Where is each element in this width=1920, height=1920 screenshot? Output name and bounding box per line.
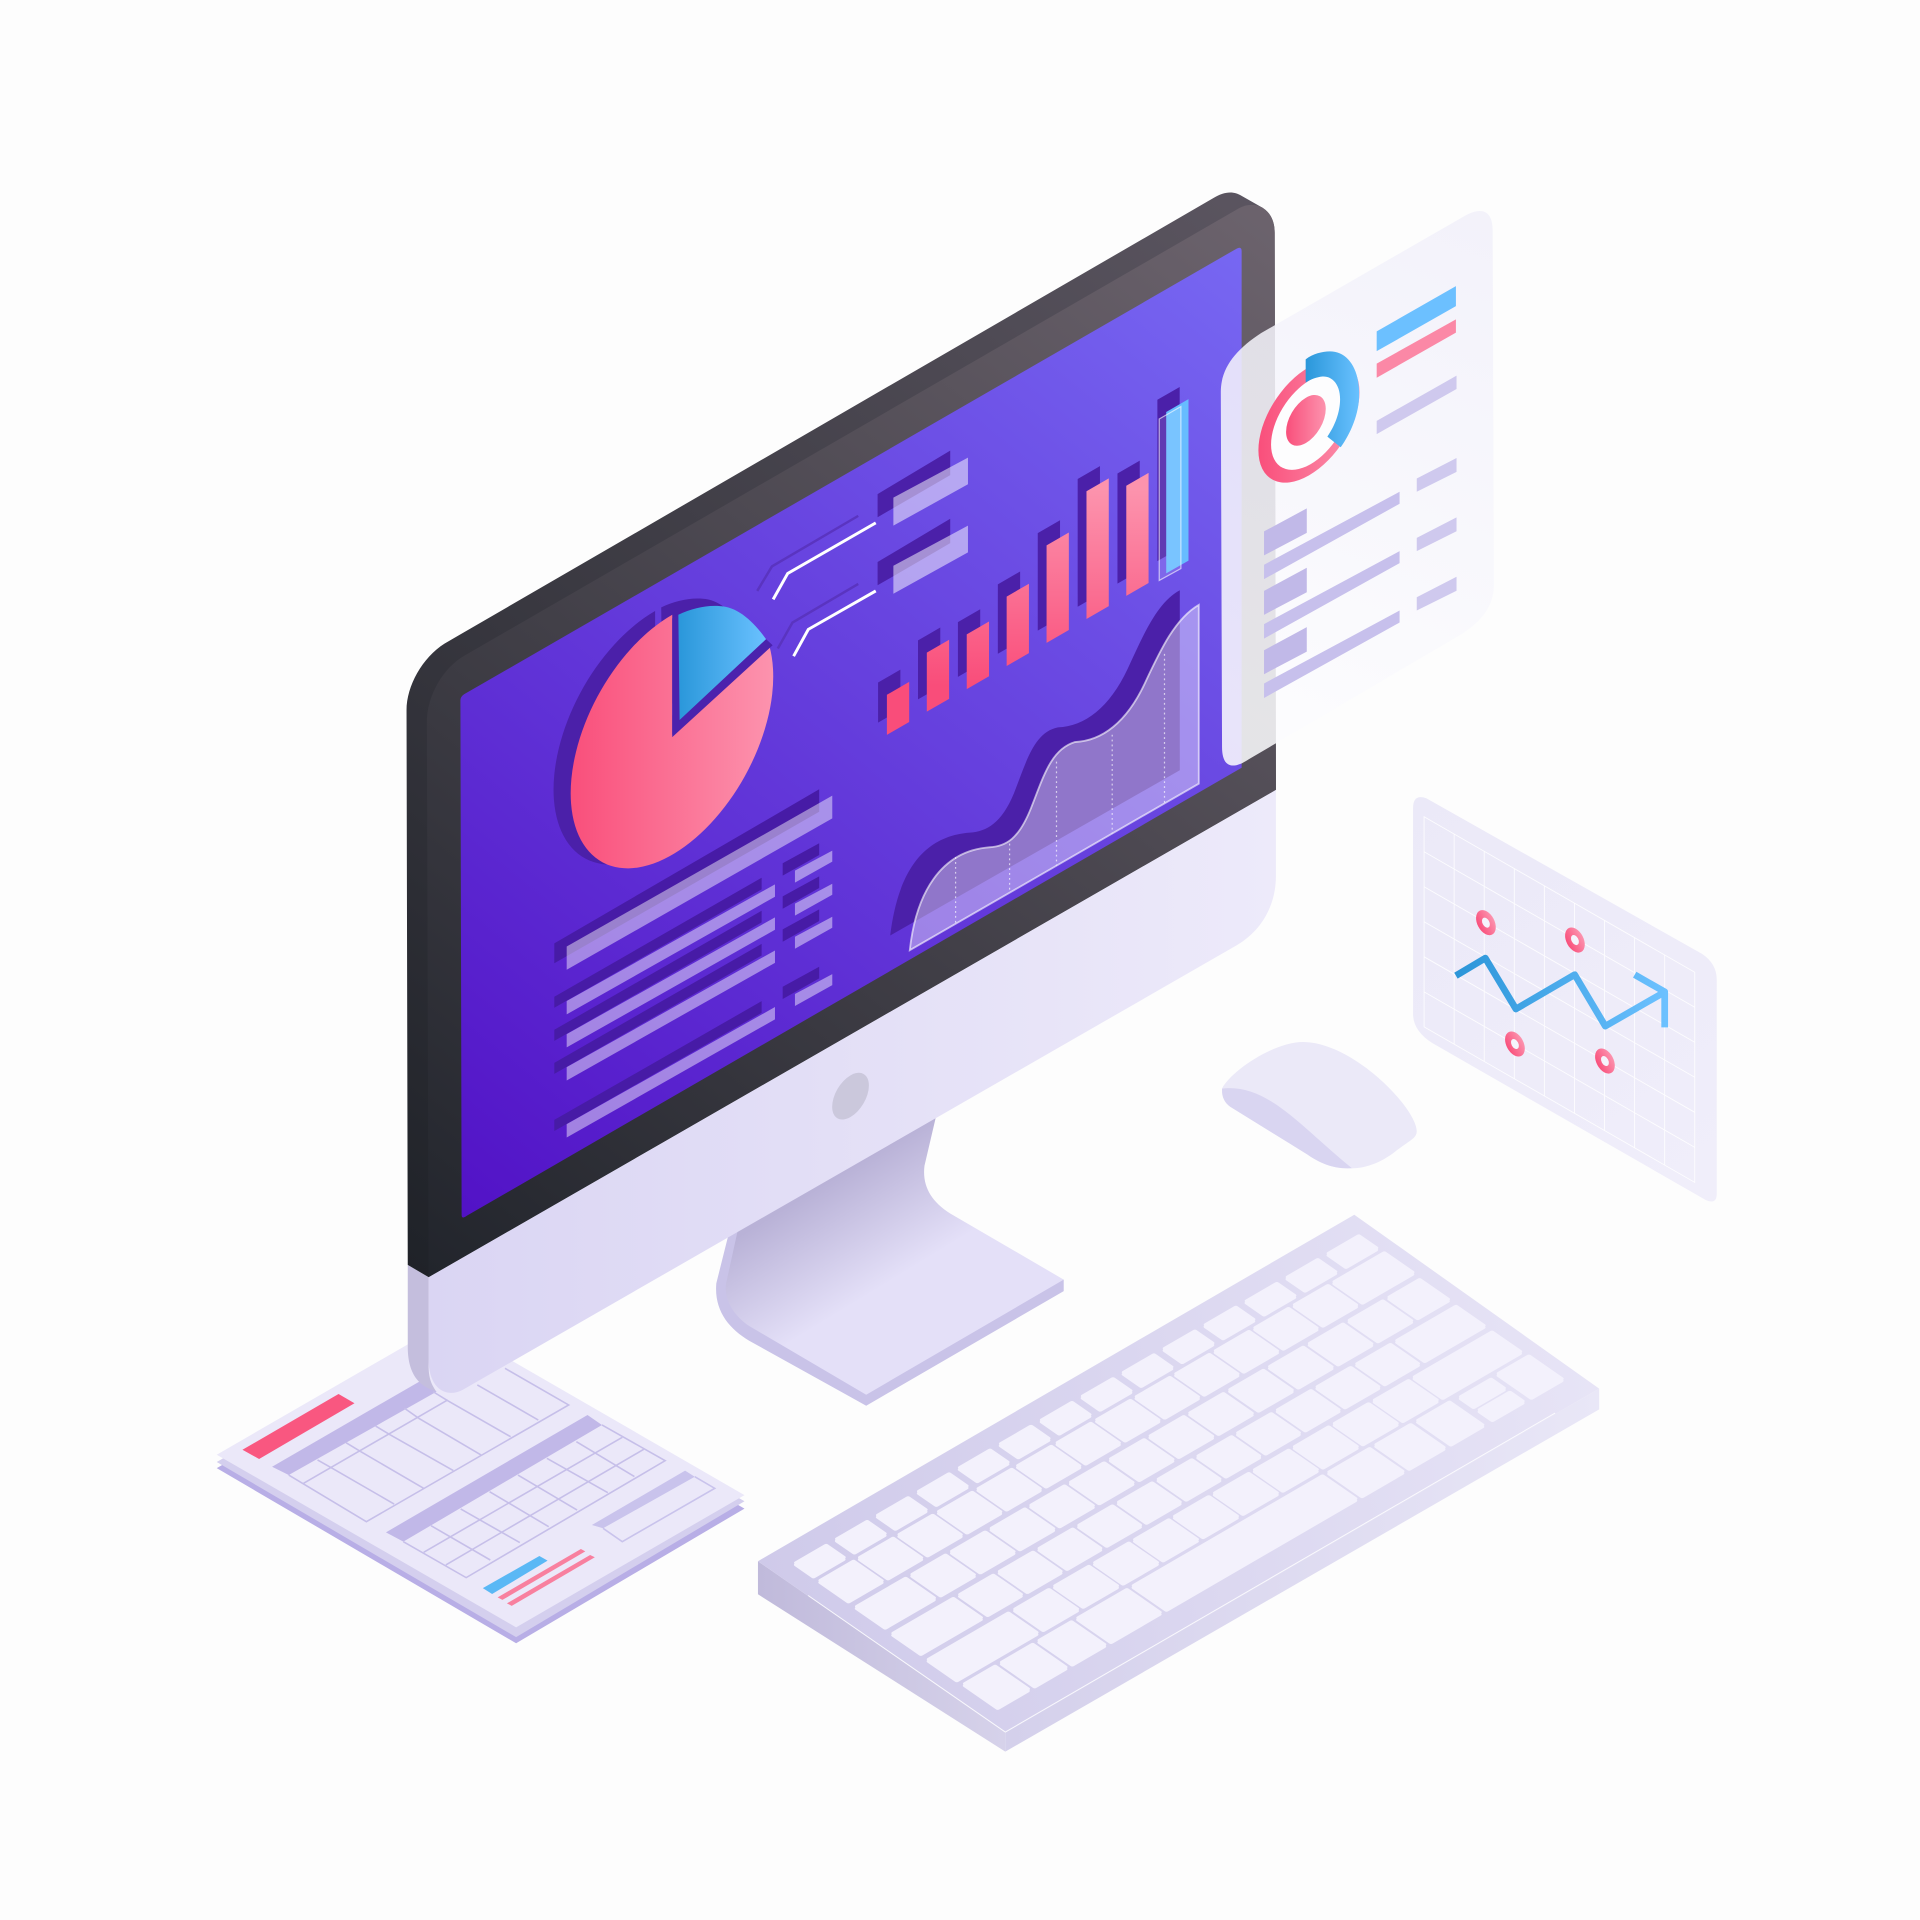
screen bbox=[460, 248, 1242, 1217]
colour legend bars bbox=[483, 1549, 595, 1606]
logo bbox=[832, 1065, 869, 1128]
legend bars bbox=[1377, 286, 1457, 434]
callout label boxes bbox=[878, 451, 968, 594]
mouse bbox=[1222, 1042, 1417, 1168]
chin bbox=[429, 790, 1276, 1393]
monitor stand bbox=[716, 1108, 1064, 1406]
pie chart bbox=[554, 553, 773, 913]
table two bbox=[386, 1415, 665, 1578]
data table on screen bbox=[554, 789, 832, 1138]
bar chart bbox=[878, 387, 1188, 735]
ring markers bbox=[1472, 907, 1619, 1077]
list rows bbox=[1264, 458, 1457, 698]
bezel front bbox=[427, 205, 1276, 1277]
red title bar bbox=[242, 1394, 354, 1459]
keys bbox=[788, 1233, 1569, 1711]
small box bbox=[592, 1471, 715, 1542]
donut chart bbox=[1258, 338, 1360, 504]
bezel outer bbox=[407, 192, 1276, 1277]
chin side bbox=[408, 1265, 436, 1391]
grid bbox=[1424, 817, 1695, 1182]
floating glass panel bbox=[1221, 211, 1494, 766]
trend line with arrow bbox=[1456, 958, 1665, 1027]
area chart bbox=[890, 590, 1199, 950]
pie callout lines bbox=[757, 516, 876, 656]
table one bbox=[272, 1368, 569, 1522]
floating line chart card bbox=[1413, 797, 1717, 1202]
monitor bbox=[407, 192, 1276, 1393]
document sheets with tables bbox=[217, 1322, 744, 1643]
keyboard bbox=[758, 1215, 1599, 1752]
